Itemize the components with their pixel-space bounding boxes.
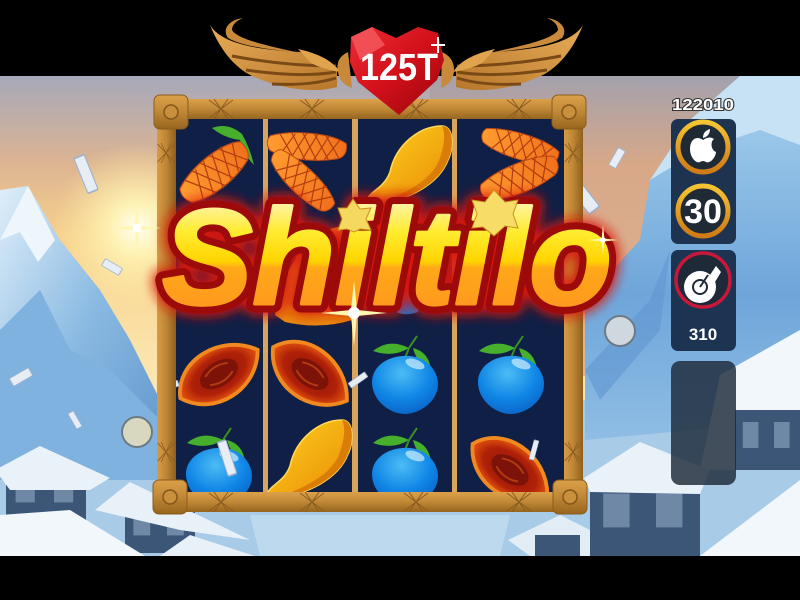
- score value: 122010: [672, 97, 734, 114]
- snowy village right: [508, 410, 800, 556]
- winged heart badge: [210, 18, 583, 115]
- fruit symbols: hidden middle row: [275, 226, 425, 326]
- side panel: score: [671, 97, 736, 485]
- heart value: 125T: [360, 47, 438, 89]
- panel: target 310: 310: [689, 325, 717, 344]
- fruit symbols: third row: [167, 326, 544, 422]
- panel: apple and 30: 30: [684, 193, 722, 231]
- game title: Shiltilo: Shiltilo: [162, 181, 612, 333]
- star ornaments: [338, 199, 371, 232]
- fruit symbols: bottom row: [161, 372, 562, 517]
- wooden frame: [153, 95, 587, 514]
- panel: target 310: [671, 250, 736, 351]
- slot machine reels: [161, 119, 564, 517]
- left mountain: [0, 186, 160, 480]
- fruit symbols: top row: [174, 124, 563, 218]
- right mountain: [585, 76, 800, 470]
- icon: target: [684, 266, 721, 303]
- game title: Shiltilo: Shiltilo: [162, 181, 612, 333]
- panel: apple and 30: [671, 119, 736, 244]
- panel: empty slot: [671, 361, 736, 485]
- snowy village left: [0, 446, 510, 556]
- reel dividers: [263, 119, 457, 492]
- game title: Shiltilo: Shiltilo: [162, 181, 612, 333]
- flying ice shards: [9, 147, 635, 447]
- ruby heart: [350, 27, 444, 115]
- icon: apple: [690, 129, 716, 162]
- right wing: [441, 18, 583, 90]
- left wing: [210, 18, 352, 90]
